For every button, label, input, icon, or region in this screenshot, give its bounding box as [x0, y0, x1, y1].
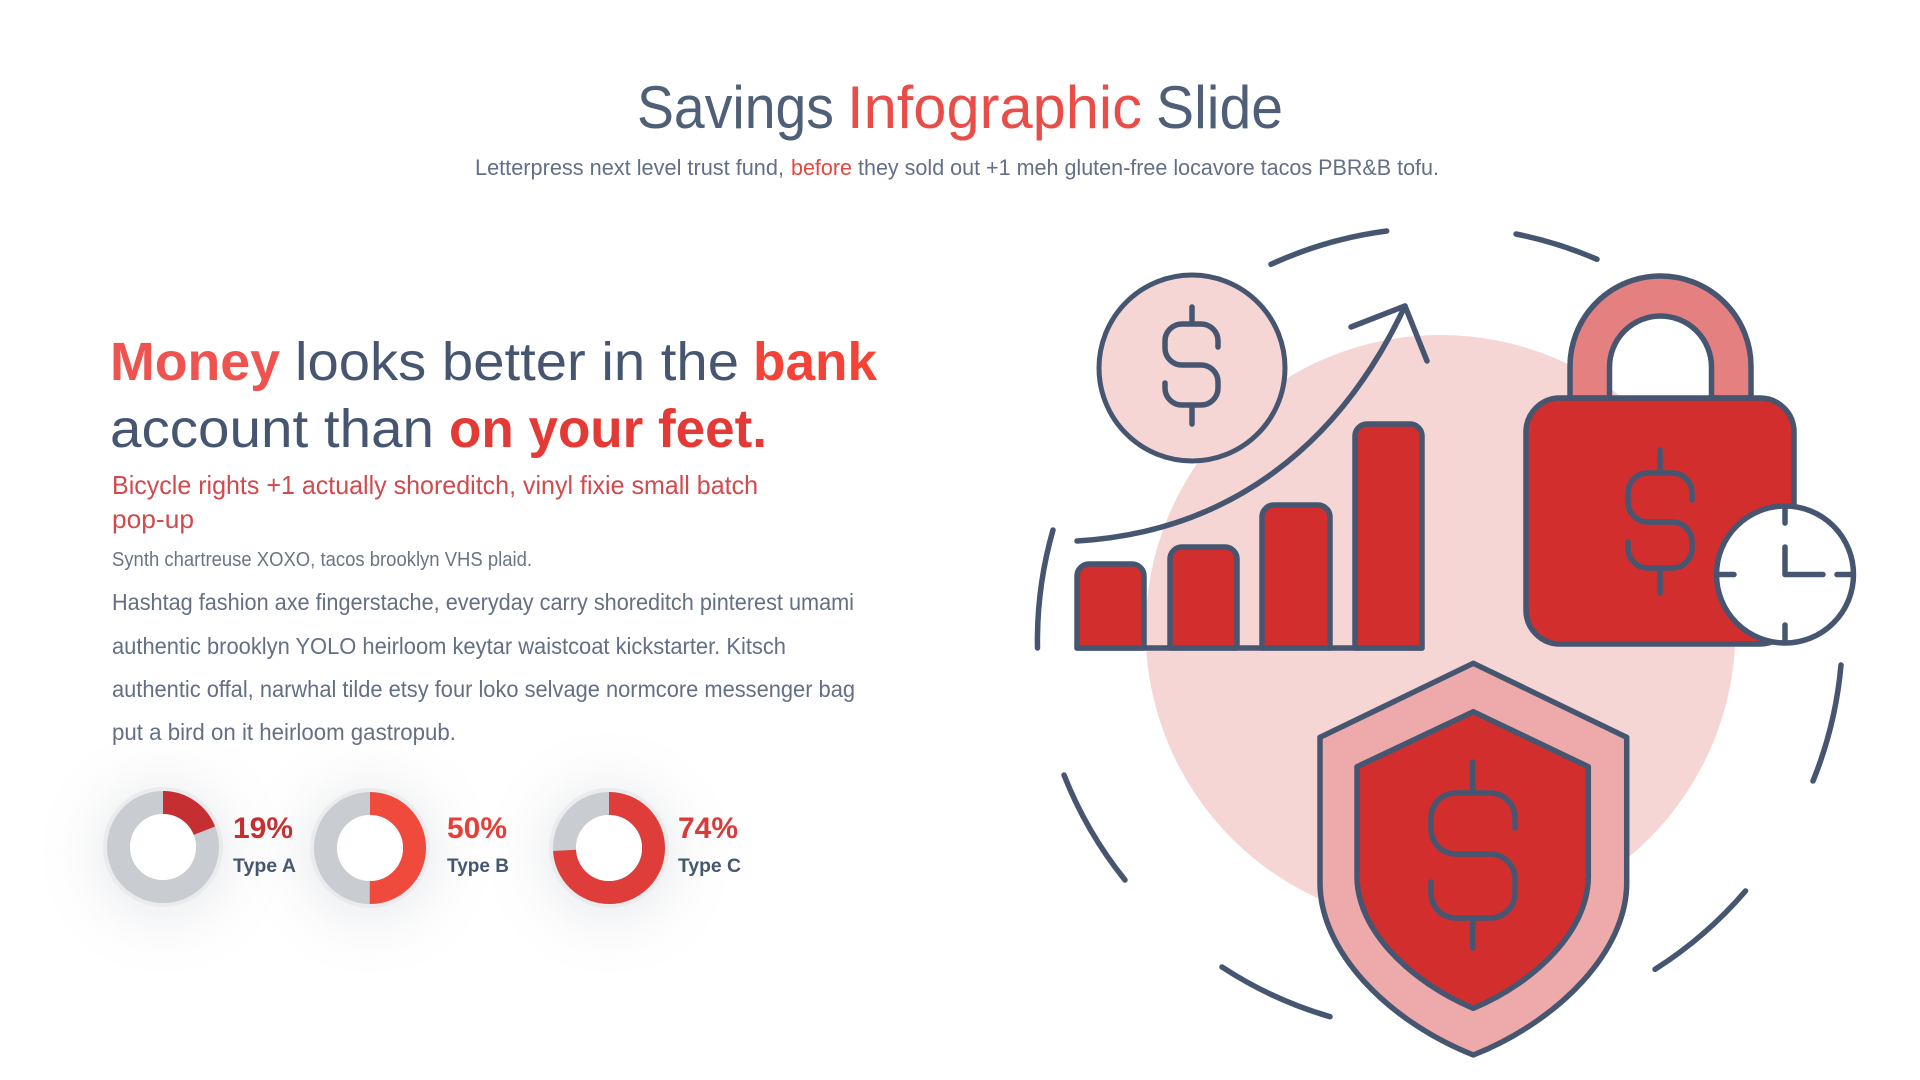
subheading: pop-up: [112, 504, 194, 534]
headline: looks better in the: [295, 332, 739, 392]
donut chart: Type C 74%: [543, 787, 675, 919]
label: Type B: 50%: [447, 812, 507, 845]
headline: on your feet.: [449, 399, 767, 459]
background pink circle: [1146, 335, 1736, 925]
arrow: growth trend: [1077, 306, 1427, 541]
subtitle: before: [791, 155, 852, 180]
body paragraph: authentic brooklyn YOLO heirloom keytar waistcoat kickstarter. Kitsch: [112, 633, 786, 659]
label: Type C: [678, 812, 741, 877]
icon: growth bar chart: [1077, 424, 1422, 648]
tagline: Synth chartreuse XOXO, tacos brooklyn VHS plaid.: [112, 549, 532, 571]
icon: dollar coin: [1099, 275, 1285, 461]
headline: bank: [753, 332, 878, 392]
dashed orbit ring: [1037, 231, 1841, 1017]
subheading: [112, 470, 758, 534]
icon: padlock: [1526, 276, 1794, 644]
title: Slide: [1156, 74, 1283, 141]
icon: clock: [1716, 506, 1854, 643]
subtitle: Letterpress next level trust fund,: [475, 155, 784, 180]
body paragraph: [112, 589, 855, 745]
title: Savings: [637, 74, 834, 141]
body paragraph: put a bird on it heirloom gastropub.: [112, 719, 456, 745]
headline: [110, 332, 878, 459]
icon: shield: [1320, 663, 1627, 1055]
label: Type B: Type B: [447, 856, 509, 877]
body paragraph: authentic offal, narwhal tilde etsy four loko selvage normcore messenger bag: [112, 676, 855, 702]
headline: Money: [110, 332, 280, 392]
label: Type A: 19%: [233, 812, 293, 845]
label: Type C: Type C: [678, 856, 741, 877]
subheading: Bicycle rights +1 actually shoreditch, vinyl fixie small batch: [112, 470, 758, 500]
label: Type B: [447, 812, 509, 877]
donut chart: Type A 19%: [97, 786, 229, 918]
label: Type C: 74%: [678, 812, 738, 845]
label: Type A: [233, 812, 296, 877]
subtitle: [475, 155, 1439, 180]
title: Infographic: [847, 74, 1142, 141]
title: [637, 74, 1283, 141]
subtitle: they sold out +1 meh gluten-free locavore tacos PBR&B tofu.: [858, 155, 1439, 180]
body paragraph: Hashtag fashion axe fingerstache, everyday carry shoreditch pinterest umami: [112, 589, 854, 615]
label: Type A: Type A: [233, 856, 296, 877]
donut chart: Type B 50%: [304, 787, 436, 919]
headline: account than: [110, 399, 434, 459]
